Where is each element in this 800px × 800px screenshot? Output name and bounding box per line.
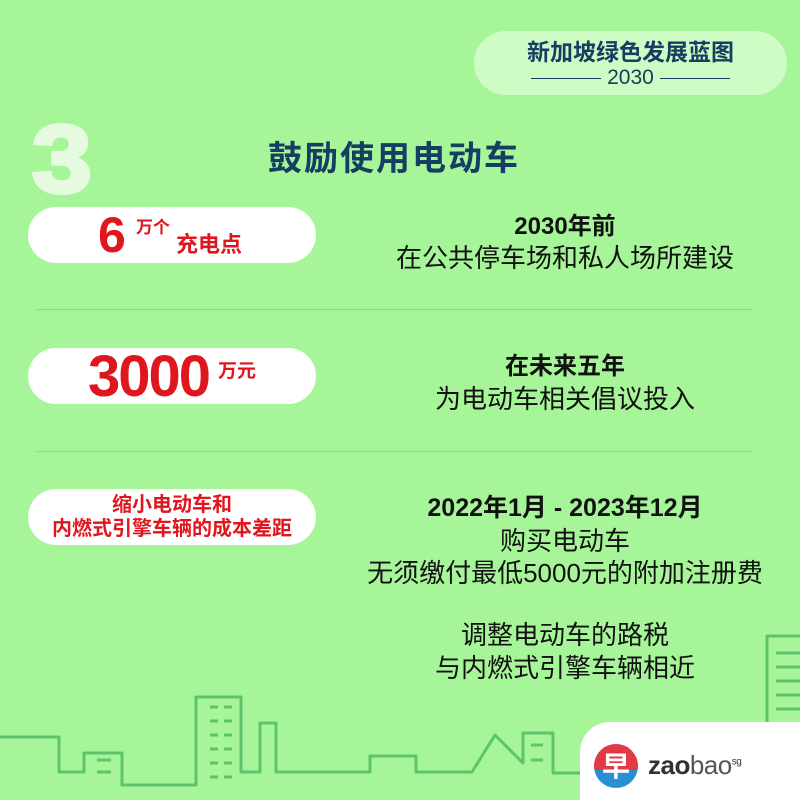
text: road tax <box>435 620 695 683</box>
icon: zaobao circle: 早 <box>602 745 630 785</box>
pill: cost gap: 内燃式引擎车辆的成本差距 <box>52 518 292 540</box>
logo: zaobao: zaobaosg <box>648 750 741 780</box>
text: road tax: 与内燃式引擎车辆相近 <box>435 653 695 683</box>
title: 鼓励使用电动车 <box>268 140 520 178</box>
text: 2030年前: 2030年前 <box>514 213 616 240</box>
text: 2030年前: 在公共停车场和私人场所建设 <box>396 243 734 273</box>
pill: 6万个充电点 <box>28 207 316 263</box>
badge: blueprint 2030: 新加坡绿色发展蓝图 <box>527 39 734 65</box>
pill: 3000万元: 3000 <box>88 344 209 409</box>
text: 在未来五年: 在未来五年 <box>505 353 625 380</box>
text: 2022-2023: 无须缴付最低5000元的附加注册费 <box>367 558 763 588</box>
pill: cost gap <box>28 489 316 545</box>
text: 2022-2023 <box>367 494 763 588</box>
text: 2022-2023: 2022年1月 - 2023年12月 <box>427 494 703 522</box>
pill: 6万个充电点: 万个 <box>136 218 170 237</box>
badge: blueprint 2030: 2030 <box>607 66 654 89</box>
text: 在未来五年: 为电动车相关倡议投入 <box>435 384 695 414</box>
big number 3: 3 <box>32 106 92 213</box>
pill: 3000万元 <box>28 348 316 404</box>
text: road tax: 调整电动车的路税 <box>461 620 669 650</box>
pill: 6万个充电点: 充电点 <box>176 232 242 257</box>
text: 2030年前 <box>396 213 734 273</box>
icon: zaobao circle <box>594 744 638 788</box>
badge: blueprint 2030 <box>474 31 787 95</box>
text: 在未来五年 <box>435 353 695 414</box>
pill: 3000万元: 万元 <box>218 361 256 382</box>
logo: zaobao <box>580 722 800 800</box>
text: 2022-2023: 购买电动车 <box>500 526 630 556</box>
pill: cost gap: 缩小电动车和 <box>112 494 232 516</box>
pill: 6万个充电点: 6 <box>98 207 126 263</box>
